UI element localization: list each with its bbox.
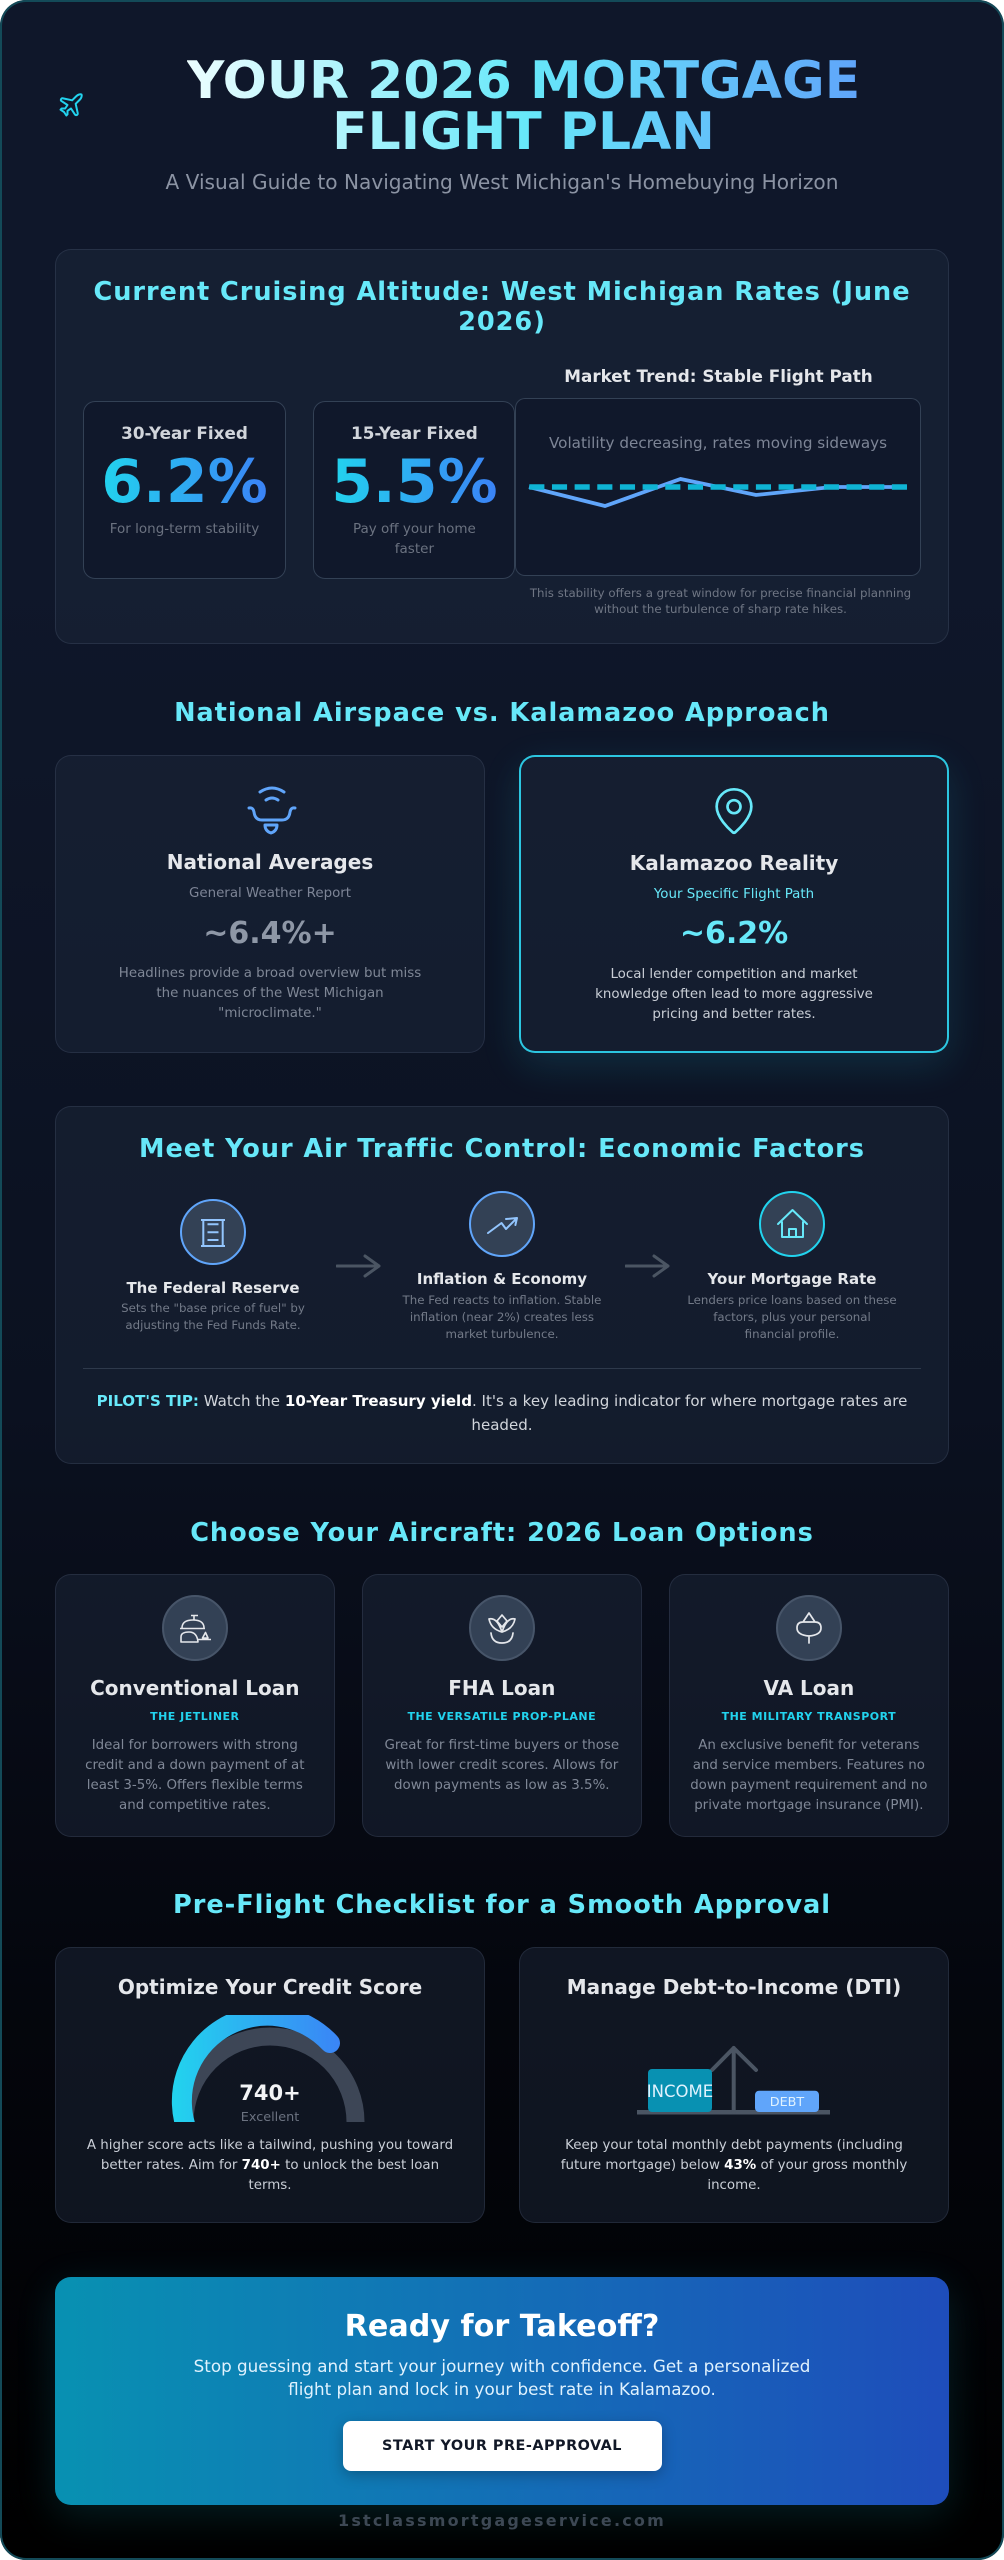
card text: future mortgage) below 43% of your gross monthly <box>561 2158 907 2173</box>
card text: pricing and better rates. <box>652 1006 816 1022</box>
step text: inflation (near 2%) creates less <box>410 1310 594 1324</box>
stability note: without the turbulence of sharp rate hikes. <box>594 602 847 616</box>
step: inflation and economy <box>402 1191 601 1341</box>
line chart: stable flight path <box>515 398 921 576</box>
pilot's tip <box>97 1392 907 1434</box>
step text: Lenders price loans based on these <box>687 1293 897 1307</box>
card text: Local lender competition and market <box>610 966 858 982</box>
gauge value: 740+ <box>239 2081 301 2105</box>
step text: The Fed reacts to inflation. Stable <box>403 1293 601 1307</box>
loan text: and service members. Features no <box>693 1758 925 1772</box>
trend lines <box>528 477 907 508</box>
panel: kalamazoo reality <box>519 755 949 1053</box>
arrow <box>625 1254 670 1278</box>
loan text: with lower credit scores. Allows for <box>385 1758 618 1772</box>
icon: airplane <box>60 93 83 116</box>
step title: The Federal Reserve <box>126 1279 300 1297</box>
heading: air traffic control: Meet Your Air Traffic Control: Economic Factors <box>139 1134 865 1164</box>
stability note: This stability offers a great window for precise financial planning <box>530 586 911 600</box>
rate note: faster <box>395 541 434 557</box>
loan text <box>85 1738 304 1812</box>
icon: federal reserve building <box>180 1199 246 1265</box>
chart caption: Volatility decreasing, rates moving sideways <box>549 434 887 452</box>
card text: Keep your total monthly debt payments (including <box>565 2138 903 2153</box>
icon: map pin <box>715 788 753 834</box>
loan title: FHA Loan <box>448 1676 555 1700</box>
step text: financial profile. <box>745 1327 839 1341</box>
card text: better rates. Aim for 740+ to unlock the best loan <box>101 2158 439 2173</box>
card text <box>87 2138 453 2193</box>
loan tag: THE JETLINER <box>150 1710 240 1723</box>
button: start your pre-approval <box>342 2421 662 2471</box>
step text <box>687 1293 897 1341</box>
heading: pre-flight checklist: Pre-Flight Checklist for a Smooth Approval <box>173 1890 831 1920</box>
cta text: Stop guessing and start your journey with confidence. Get a personalized <box>194 2356 810 2376</box>
rate card: 30-year fixed <box>83 401 286 579</box>
panel: credit score <box>55 1947 485 2223</box>
step: your mortgage rate <box>687 1191 897 1341</box>
icon: weather signal <box>248 786 296 834</box>
chart: income vs debt balance <box>637 2046 830 2114</box>
icon: military transport <box>776 1595 842 1661</box>
title: YOUR 2026 MORTGAGE <box>187 50 860 110</box>
rate card: 15-year fixed <box>313 401 515 579</box>
title: FLIGHT PLAN <box>332 102 715 162</box>
card text: income. <box>707 2178 761 2193</box>
cta text: flight plan and lock in your best rate in Kalamazoo. <box>288 2379 716 2399</box>
chart heading: Market Trend: Stable Flight Path <box>564 366 873 386</box>
rate note: For long-term stability <box>110 521 259 537</box>
gauge: credit score <box>172 2015 364 2122</box>
step text <box>121 1301 305 1332</box>
subtitle: A Visual Guide to Navigating West Michigan's Homebuying Horizon <box>166 170 838 194</box>
chart: income vs debt balance: DEBT <box>770 2095 804 2110</box>
loan tag: THE MILITARY TRANSPORT <box>722 1710 896 1723</box>
panel: current rates <box>55 249 949 644</box>
loan tag: THE VERSATILE PROP-PLANE <box>407 1710 596 1723</box>
panel: conventional loan <box>55 1574 335 1837</box>
cta text <box>194 2356 810 2399</box>
panel: va loan <box>669 1574 949 1837</box>
loan text: credit and a down payment of at <box>85 1758 304 1772</box>
icon: trending chart <box>469 1191 535 1257</box>
chart: income vs debt balance: INCOME <box>647 2082 713 2101</box>
card text <box>595 966 873 1022</box>
step title: Inflation & Economy <box>417 1270 587 1288</box>
card text: terms. <box>248 2178 292 2193</box>
panel: fha loan <box>362 1574 642 1837</box>
card title: Kalamazoo Reality <box>630 850 838 874</box>
loan text <box>690 1738 928 1812</box>
heading: current cruising altitude <box>93 277 910 337</box>
card title: National Averages <box>167 850 373 874</box>
step text: Sets the "base price of fuel" by <box>121 1301 305 1315</box>
loan text: down payments as low as 3.5%. <box>394 1778 610 1792</box>
card text: knowledge often lead to more aggressive <box>595 986 873 1002</box>
rate label: 30-Year Fixed <box>121 423 248 443</box>
heading: loan options: Choose Your Aircraft: 2026 Loan Options <box>190 1518 814 1548</box>
loan text: and competitive rates. <box>119 1798 271 1812</box>
icon: prop-plane <box>469 1595 535 1661</box>
step: federal reserve <box>121 1199 305 1332</box>
panel: call to action <box>55 2277 949 2505</box>
button: start your pre-approval: START YOUR PRE-APPROVAL <box>382 2438 622 2454</box>
national rate value: ~6.4%+ <box>203 916 337 950</box>
step text <box>402 1293 601 1341</box>
card title: Manage Debt-to-Income (DTI) <box>567 1975 901 1999</box>
title <box>187 50 860 162</box>
loan title: VA Loan <box>763 1676 854 1700</box>
footer: website: 1stclassmortgageservice.com <box>338 2511 666 2530</box>
cta heading: Ready for Takeoff? <box>345 2309 659 2344</box>
step text: factors, plus your personal <box>713 1310 871 1324</box>
loan title: Conventional Loan <box>90 1676 300 1700</box>
panel: debt-to-income <box>519 1947 949 2223</box>
step text: market turbulence. <box>445 1327 559 1341</box>
loan text: Great for first-time buyers or those <box>384 1738 619 1752</box>
rate value: 5.5% <box>331 447 498 517</box>
card text <box>119 966 421 1020</box>
pilot's tip: PILOT'S TIP: Watch the 10-Year Treasury yield. It's a key leading indicator for where mortgage rates are <box>97 1392 907 1410</box>
loan text: Ideal for borrowers with strong <box>92 1738 298 1752</box>
card text: "microclimate." <box>218 1006 322 1020</box>
gauge label: Excellent <box>241 2110 299 2125</box>
rate label: 15-Year Fixed <box>351 423 478 443</box>
card subtitle: Your Specific Flight Path <box>654 886 814 902</box>
panel: economic factors <box>55 1106 949 1464</box>
rate value: 6.2% <box>101 447 268 517</box>
arrow <box>336 1254 380 1278</box>
kalamazoo rate value: ~6.2% <box>680 916 788 951</box>
loan text: least 3-5%. Offers flexible terms <box>87 1778 303 1792</box>
card text <box>561 2138 907 2193</box>
card subtitle: General Weather Report <box>189 886 351 901</box>
card title: Optimize Your Credit Score <box>118 1975 422 1999</box>
pilot's tip: headed. <box>471 1416 533 1434</box>
card text: Headlines provide a broad overview but miss <box>119 966 421 980</box>
stability note <box>530 586 911 616</box>
step title: Your Mortgage Rate <box>708 1270 876 1288</box>
icon: house <box>759 1191 825 1257</box>
heading: current cruising altitude: Current Cruising Altitude: West Michigan Rates (June <box>93 277 910 307</box>
card text: the nuances of the West Michigan <box>156 986 384 1000</box>
rate note <box>353 521 476 557</box>
step text: adjusting the Fed Funds Rate. <box>125 1318 301 1332</box>
card text: A higher score acts like a tailwind, pushing you toward <box>87 2138 453 2153</box>
loan text <box>384 1738 619 1792</box>
heading: national vs kalamazoo: National Airspace vs. Kalamazoo Approach <box>174 698 830 728</box>
loan text: down payment requirement and no <box>690 1778 928 1792</box>
loan text: An exclusive benefit for veterans <box>698 1738 919 1752</box>
rate note: Pay off your home <box>353 521 476 537</box>
loan text: private mortgage insurance (PMI). <box>694 1798 924 1812</box>
heading: current cruising altitude: 2026) <box>458 307 546 337</box>
panel: national averages <box>55 755 485 1053</box>
icon: jetliner <box>162 1595 228 1661</box>
